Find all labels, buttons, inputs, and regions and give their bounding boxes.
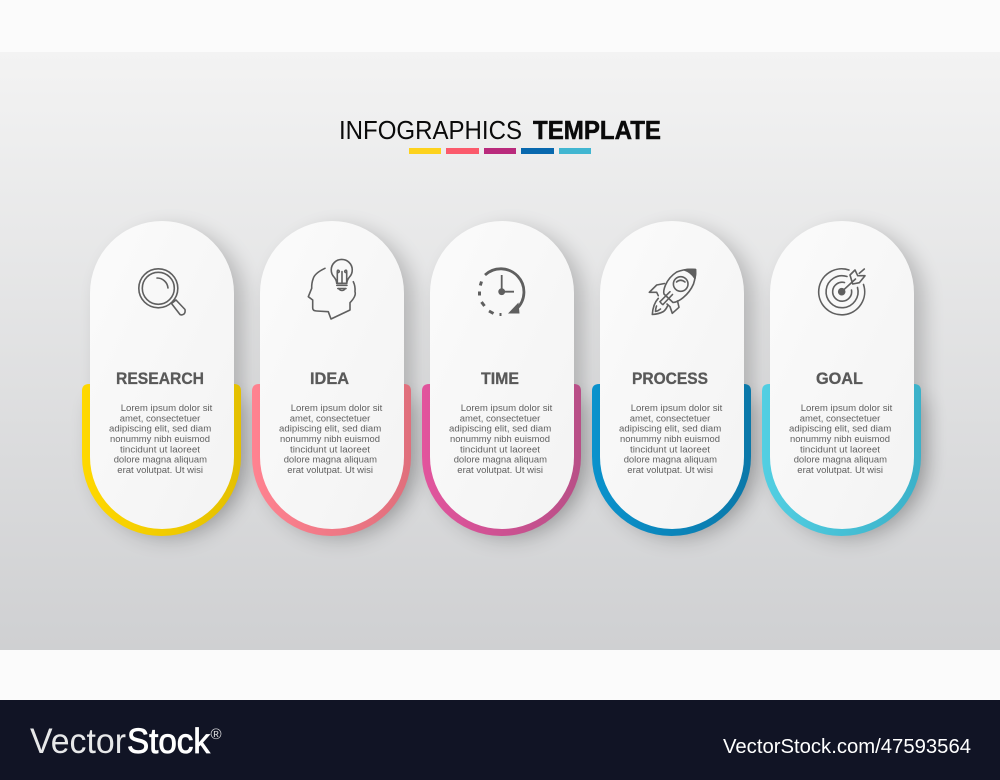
panel: time (422, 221, 588, 541)
text block: research: dolore magna aliquam (114, 455, 207, 466)
text block: process: Lorem ipsum dolor sit (631, 403, 723, 414)
text block: process: nonummy nibh euismod (620, 434, 720, 445)
footer image id: VectorStock.com/47593564 (723, 735, 971, 758)
text block: idea: Lorem ipsum dolor sit (291, 403, 383, 414)
text block: time: amet, consectetuer (460, 413, 541, 424)
text block: research: nonummy nibh euismod (110, 434, 210, 445)
text block: time: adipiscing elit, sed diam (449, 424, 551, 435)
text block: time: nonummy nibh euismod (450, 434, 550, 445)
panel: process (592, 221, 758, 541)
panel: research (82, 221, 248, 541)
text block: idea: erat volutpat. Ut wisi (287, 465, 373, 476)
title: INFOGRAPHICS (339, 117, 522, 145)
icon: rocket (649, 269, 696, 314)
footer logo (30, 722, 222, 761)
text block: research: Lorem ipsum dolor sit (121, 403, 213, 414)
text block: goal: adipiscing elit, sed diam (789, 424, 891, 435)
text block: idea: nonummy nibh euismod (280, 434, 380, 445)
text block: research (109, 403, 213, 476)
text block: research: tincidunt ut laoreet (120, 444, 200, 455)
text block: time (449, 403, 553, 476)
text block: process: amet, consectetuer (630, 413, 711, 424)
footer logo: Stock (127, 722, 210, 761)
text block: process: erat volutpat. Ut wisi (627, 465, 713, 476)
text block: goal: Lorem ipsum dolor sit (801, 403, 893, 414)
text block: process: tincidunt ut laoreet (630, 444, 710, 455)
text block: time: Lorem ipsum dolor sit (461, 403, 553, 414)
heading: research: RESEARCH (116, 369, 204, 388)
panel: goal (762, 221, 928, 541)
heading: time: TIME (481, 369, 519, 388)
footer logo: ® (210, 726, 222, 743)
text block: process (619, 403, 723, 476)
text block: goal (789, 403, 893, 476)
text block: idea: dolore magna aliquam (284, 455, 377, 466)
text block: idea: amet, consectetuer (290, 413, 371, 424)
text block: idea: tincidunt ut laoreet (290, 444, 370, 455)
text block: idea: adipiscing elit, sed diam (279, 424, 381, 435)
title colour bars (409, 148, 591, 154)
heading: idea: IDEA (310, 369, 349, 388)
heading: process: PROCESS (632, 369, 708, 388)
footer bar (0, 700, 1000, 780)
title: TEMPLATE (533, 117, 661, 145)
text block: research: adipiscing elit, sed diam (109, 424, 211, 435)
title (339, 117, 661, 145)
text block: goal: amet, consectetuer (800, 413, 881, 424)
icon: magnifying glass (139, 269, 185, 315)
text block: goal: dolore magna aliquam (794, 455, 887, 466)
background panel (0, 52, 1000, 650)
icon: clock with arrow (480, 269, 524, 314)
text block: process: adipiscing elit, sed diam (619, 424, 721, 435)
icon: head with light bulb (308, 259, 355, 319)
text block: goal: erat volutpat. Ut wisi (797, 465, 883, 476)
footer logo: Vector (30, 722, 126, 761)
icon: target with arrow (819, 269, 865, 315)
text block: goal: tincidunt ut laoreet (800, 444, 880, 455)
text block: research: amet, consectetuer (120, 413, 201, 424)
text block: goal: nonummy nibh euismod (790, 434, 890, 445)
text block: research: erat volutpat. Ut wisi (117, 465, 203, 476)
text block: time: dolore magna aliquam (454, 455, 547, 466)
panel: idea (252, 221, 418, 541)
text block: process: dolore magna aliquam (624, 455, 717, 466)
heading: goal: GOAL (816, 369, 863, 388)
text block: idea (279, 403, 383, 476)
text block: time: tincidunt ut laoreet (460, 444, 540, 455)
text block: time: erat volutpat. Ut wisi (457, 465, 543, 476)
